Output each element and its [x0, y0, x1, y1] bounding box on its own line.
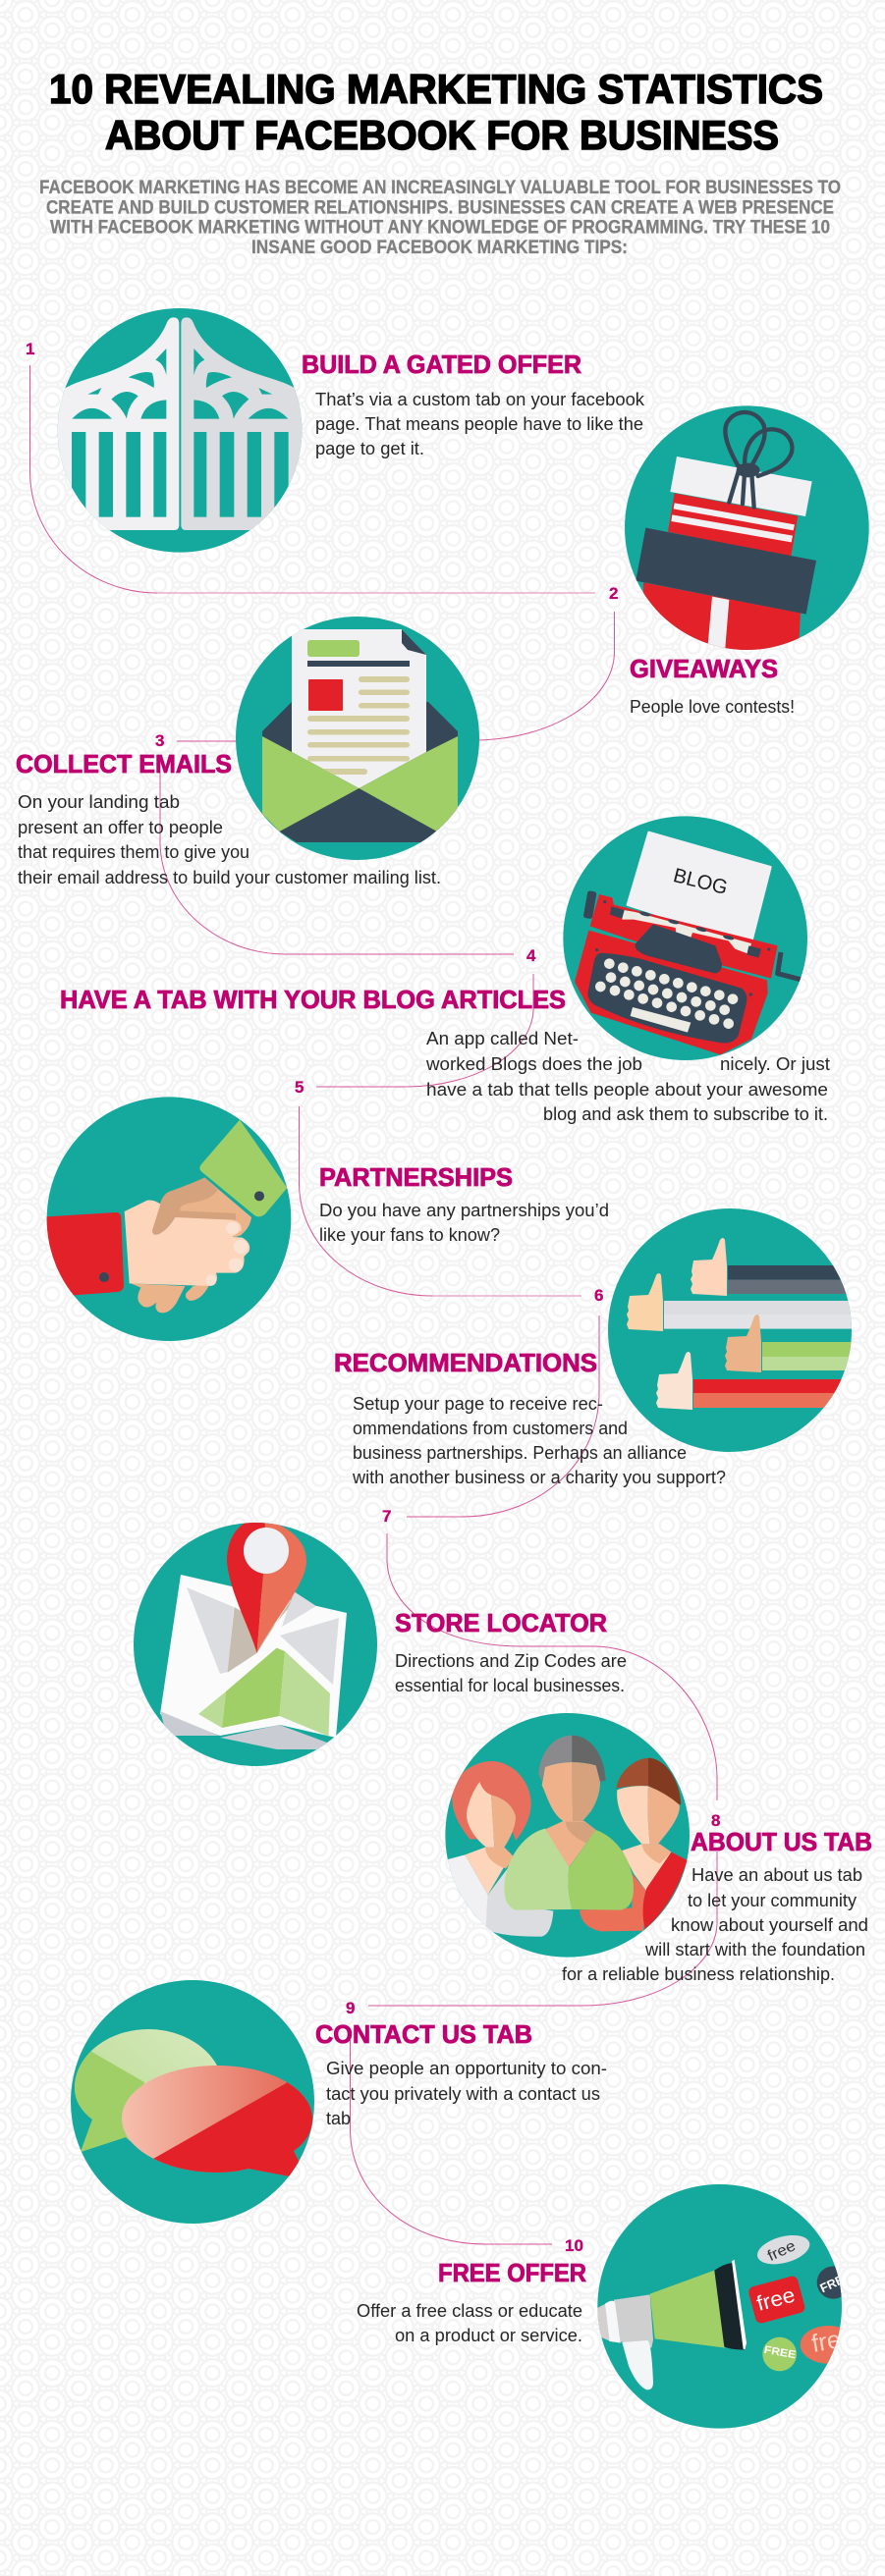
title: ABOUT FACEBOOK FOR BUSINESS — [105, 112, 779, 158]
body text: page to get it. — [315, 439, 424, 458]
body text: essential for local businesses. — [395, 1676, 625, 1695]
icon: gift boxes — [625, 405, 869, 660]
body text: present an offer to people — [18, 818, 223, 837]
body text: blog and ask them to subscribe to it. — [543, 1104, 828, 1124]
body text: to let your community — [688, 1891, 857, 1910]
body text: their email address to build your customer mailing list. — [18, 868, 441, 887]
body text: On your landing tab — [18, 792, 180, 812]
body text: like your fans to know? — [319, 1225, 500, 1245]
number 10: 10 — [565, 2236, 583, 2255]
heading: CONTACT US TAB — [315, 2019, 532, 2049]
heading: PARTNERSHIPS — [319, 1162, 513, 1192]
connector lines between steps — [29, 365, 717, 2244]
body text: Do you have any partnerships you’d — [319, 1201, 609, 1220]
icon: map pin — [134, 1520, 377, 1766]
body text: Have an about us tab — [691, 1865, 862, 1885]
body text: on a product or service. — [395, 2326, 582, 2345]
heading: HAVE A TAB WITH YOUR BLOG ARTICLES — [60, 985, 566, 1014]
heading: FREE OFFER — [438, 2258, 586, 2287]
body text: tab — [326, 2109, 351, 2128]
panel: step 10 free offer — [357, 2184, 857, 2429]
body text: know about yourself and — [671, 1915, 868, 1935]
body text — [425, 1029, 830, 1124]
icon: megaphone: free — [754, 2282, 798, 2316]
body text: Directions and Zip Codes are — [395, 1651, 627, 1671]
body text: with another business or a charity you support? — [352, 1468, 726, 1487]
panel: step 1 build a gated offer — [26, 308, 645, 553]
heading: RECOMMENDATIONS — [334, 1348, 597, 1377]
number 8: 8 — [711, 1811, 720, 1830]
body text — [562, 1865, 868, 1984]
body text: business partnerships. Perhaps an alliance — [353, 1443, 687, 1463]
number 4: 4 — [526, 946, 536, 965]
panel: step 5 partnerships — [39, 1078, 609, 1341]
intro text: INSANE GOOD FACEBOOK MARKETING TIPS: — [251, 238, 628, 258]
panel: step 4 blog tab — [60, 816, 830, 1124]
panel: step 3 collect emails — [16, 617, 479, 887]
body text: have a tab that tells people about your awesome — [426, 1080, 828, 1100]
number 1: 1 — [26, 340, 34, 358]
body text: ommendations from customers and — [353, 1419, 628, 1438]
body text: for a reliable business relationship. — [562, 1964, 835, 1984]
heading: STORE LOCATOR — [395, 1608, 607, 1637]
panel: step 7 store locator — [134, 1507, 627, 1766]
panel: step 2 giveaways — [609, 405, 869, 717]
body text: page. That means people have to like the — [315, 414, 643, 434]
number 5: 5 — [295, 1078, 304, 1097]
body text — [357, 2301, 582, 2345]
number 7: 7 — [382, 1507, 391, 1526]
icon: megaphone: FREE — [818, 2269, 854, 2295]
panel: step 8 about us tab — [444, 1713, 872, 1984]
body text: nicely. Or just — [720, 1054, 830, 1074]
icon: gate — [56, 308, 304, 553]
icon: megaphone — [596, 2184, 857, 2429]
body text — [395, 1651, 627, 1695]
panel: step 9 contact us tab — [71, 1980, 607, 2224]
body text: worked Blogs does the job — [425, 1054, 642, 1074]
icon: thumbs up — [608, 1208, 865, 1452]
title: 10 REVEALING MARKETING STATISTICS — [49, 66, 823, 112]
icon: speech bubbles — [71, 1980, 314, 2224]
icon: typewriter — [563, 816, 807, 1060]
heading: BUILD A GATED OFFER — [302, 349, 581, 379]
body text: Give people an opportunity to con- — [326, 2059, 607, 2078]
number 9: 9 — [346, 1999, 355, 2017]
title — [49, 66, 823, 158]
heading: COLLECT EMAILS — [16, 749, 232, 778]
body text — [319, 1201, 609, 1245]
body text — [315, 390, 645, 458]
number 6: 6 — [594, 1286, 603, 1305]
icon: megaphone: free — [809, 2324, 857, 2358]
body text — [326, 2059, 607, 2128]
heading: GIVEAWAYS — [630, 654, 778, 683]
icon: handshake — [39, 1097, 291, 1341]
body text: People love contests! — [630, 697, 795, 717]
icon: envelope — [236, 617, 479, 860]
body text — [352, 1394, 726, 1487]
icon: megaphone: free — [765, 2237, 799, 2265]
icon: megaphone: FREE — [763, 2344, 797, 2361]
icon: three people — [444, 1713, 690, 1958]
icon: typewriter: BLOG — [671, 864, 730, 899]
body text: An app called Net- — [426, 1029, 579, 1048]
body text: that requires them to give you — [18, 842, 249, 862]
body text: That’s via a custom tab on your facebook — [315, 390, 645, 409]
body text: will start with the foundation — [644, 1940, 865, 1959]
intro text — [39, 178, 841, 258]
number 2: 2 — [609, 584, 618, 603]
panel: step 6 recommendations — [334, 1208, 865, 1487]
body text — [18, 792, 441, 887]
body text: tact you privately with a contact us — [326, 2084, 600, 2104]
body text: Setup your page to receive rec- — [353, 1394, 603, 1414]
heading: ABOUT US TAB — [691, 1827, 872, 1856]
number 3: 3 — [155, 731, 164, 750]
body text: Offer a free class or educate — [357, 2301, 582, 2321]
